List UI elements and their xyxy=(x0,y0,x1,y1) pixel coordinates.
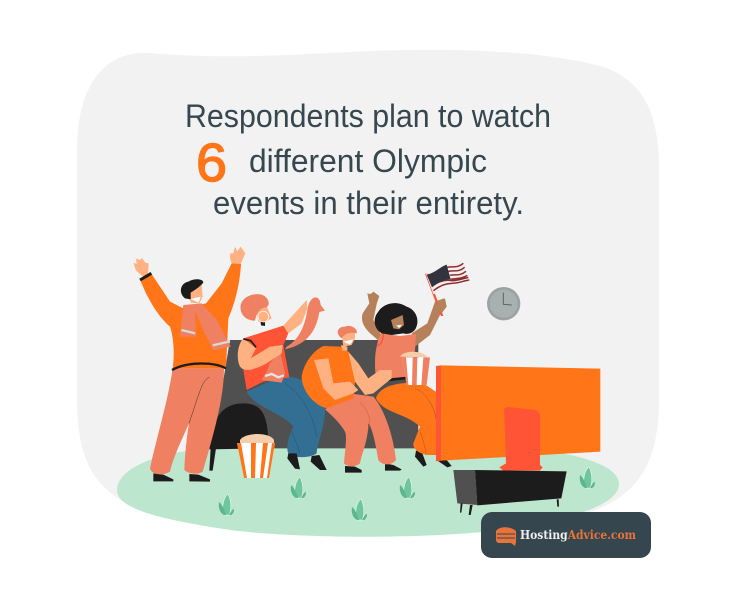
sweater xyxy=(140,263,241,368)
scarf xyxy=(180,303,231,351)
heading text: Respondents plan to watch xyxy=(185,98,551,134)
coral top xyxy=(375,333,416,382)
middle man legs xyxy=(325,393,402,473)
logo icon xyxy=(496,527,516,546)
wall clock xyxy=(487,287,520,320)
tv cabinet xyxy=(453,470,567,515)
television xyxy=(436,365,600,471)
logo badge xyxy=(481,512,651,558)
raised arms xyxy=(362,292,385,347)
middle man upper body xyxy=(302,326,392,408)
logo text: HostingAdvice.com xyxy=(520,528,636,542)
hands xyxy=(133,258,149,277)
hair xyxy=(375,303,417,335)
flag xyxy=(425,260,469,316)
heading line 3: events in their entirety. xyxy=(213,185,524,221)
shirt xyxy=(302,346,362,408)
heading text xyxy=(185,98,551,221)
woman in red shirt lower body xyxy=(247,377,327,470)
popcorn held xyxy=(400,352,430,385)
grass tufts xyxy=(219,467,595,520)
woman with flag xyxy=(362,292,452,467)
orange pants xyxy=(376,383,438,455)
green floor ellipse xyxy=(117,447,619,537)
arms xyxy=(348,352,392,395)
head xyxy=(342,331,355,347)
background blob panel xyxy=(77,50,659,532)
sofa arm xyxy=(209,403,268,449)
highlighted number 6: 6 xyxy=(196,133,227,193)
popcorn bucket front xyxy=(237,434,275,478)
trousers xyxy=(150,368,224,474)
standing man xyxy=(133,247,245,482)
heading line 2: different Olympic xyxy=(249,143,487,179)
woman in red shirt upper body xyxy=(238,294,325,390)
head xyxy=(188,283,203,303)
sofa xyxy=(209,340,418,471)
